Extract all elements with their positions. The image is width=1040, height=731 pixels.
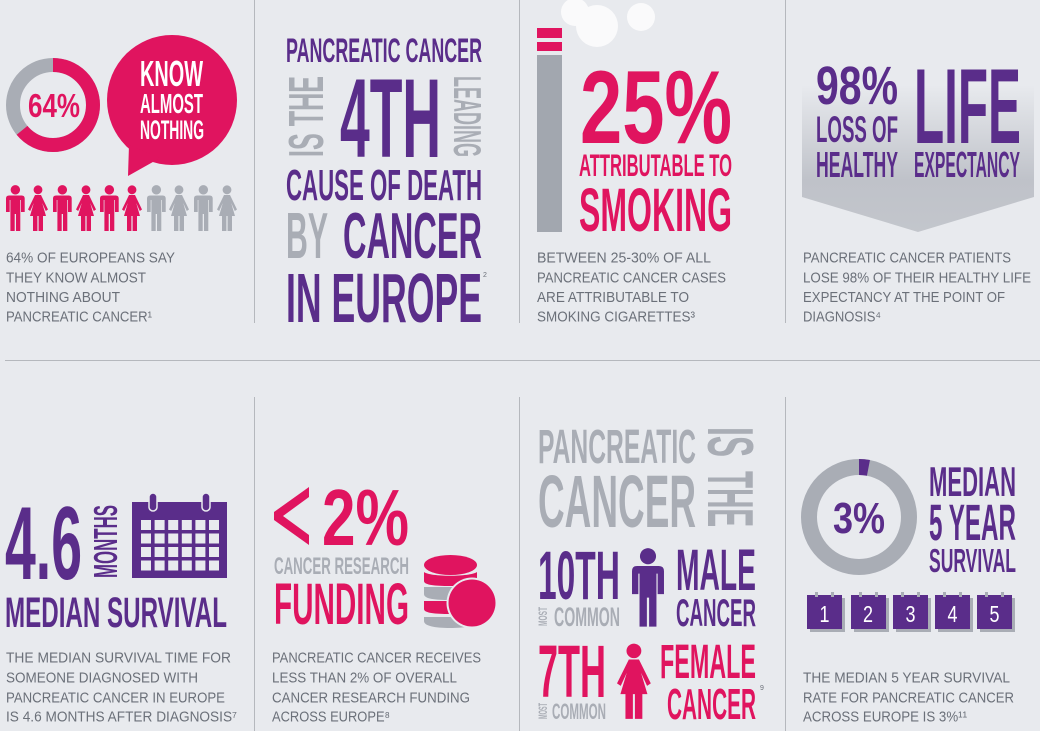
text block: funding: PANCREATIC CANCER RECEIVES: [272, 650, 481, 666]
text block: smoking: SMOKING CIGARETTES³: [537, 310, 695, 326]
heading: smoking: SMOKING: [579, 176, 732, 244]
speech bubble: know almost nothing: KNOW: [140, 53, 203, 94]
vertical text: most: MOST: [536, 607, 550, 626]
panel: most common cancer: MALE: [676, 538, 756, 603]
icon: five calendars: 5: [990, 601, 1000, 627]
big figure: 2%: 2%: [322, 473, 409, 562]
less-than sign: [274, 487, 309, 545]
icon: smoke: [561, 0, 655, 47]
icon: coins: [424, 555, 498, 628]
text block: funding: CANCER RESEARCH FUNDING: [272, 690, 470, 706]
text block: funding: ACROSS EUROPE⁸: [272, 710, 390, 726]
text block: median survival: IS 4.6 MONTHS AFTER DIAGNOSIS⁷: [6, 710, 237, 726]
text block: five year survival: RATE FOR PANCREATIC CANCER: [803, 690, 1014, 706]
text block: median survival: [6, 650, 237, 726]
panel: most common cancer: CANCER: [667, 680, 756, 729]
text block: median survival: PANCREATIC CANCER IN EUROPE: [6, 690, 225, 706]
panel: research funding: [272, 473, 498, 726]
panel: most common cancer: CANCER: [676, 592, 756, 635]
heading: median survival: MEDIAN SURVIVAL: [5, 589, 227, 637]
panel: know almost nothing: [6, 35, 237, 326]
panel: 4th leading cause: 4TH: [340, 56, 441, 181]
panel: 4th leading cause: CANCER: [343, 199, 482, 272]
footnote 2: 2: [483, 272, 487, 279]
text block: 64% of Europeans: [6, 250, 175, 326]
heading: cancer research: CANCER RESEARCH: [274, 553, 409, 580]
panel: most common cancer: [536, 420, 767, 729]
text block: life expectancy: PANCREATIC CANCER PATIENTS: [803, 250, 1011, 266]
icon: five calendars: 3: [906, 601, 916, 627]
panel: 4th leading cause: LEADING: [445, 76, 488, 157]
speech bubble: know almost nothing: NOTHING: [140, 115, 204, 145]
donut chart: 3%: [809, 467, 909, 567]
text block: 64% of Europeans: PANCREATIC CANCER¹: [6, 310, 152, 326]
text block: five year survival: [803, 670, 1014, 726]
speech bubble: know almost nothing: ALMOST: [140, 88, 203, 119]
panel: life expectancy: [802, 46, 1034, 326]
text block: smoking: BETWEEN 25-30% OF ALL: [537, 250, 711, 266]
heading: loss of: LOSS OF: [816, 109, 898, 150]
speech bubble: know almost nothing: [107, 35, 237, 176]
text block: five year survival: ACROSS EUROPE IS 3%¹¹: [803, 710, 967, 726]
heading: funding: FUNDING: [274, 572, 409, 637]
text block: 64% of Europeans: 64% OF EUROPEANS SAY: [6, 250, 175, 266]
panel: life expectancy: HEALTHY: [816, 144, 898, 185]
panel: 4th leading cause: [279, 32, 488, 337]
heading: pancreatic cancer: PANCREATIC CANCER: [286, 32, 482, 70]
heading: cause of death: CAUSE OF DEATH: [286, 161, 482, 210]
icon: cigarette: [537, 28, 562, 232]
icon: five calendars: [807, 592, 1015, 632]
panel: most common cancer: CANCER: [538, 460, 696, 543]
text block: funding: LESS THAN 2% OF OVERALL: [272, 670, 457, 686]
text block: median survival: THE MEDIAN SURVIVAL TIME FOR: [6, 650, 231, 666]
icon: five calendars: 1: [820, 601, 830, 627]
label: common: COMMON: [552, 699, 606, 724]
icon: five calendars: 2: [863, 601, 873, 627]
big figure: 4.6: 4.6: [5, 486, 82, 602]
panel: most common cancer: FEMALE: [660, 635, 756, 689]
icon: man: [632, 548, 664, 627]
text block: 64% of Europeans: THEY KNOW ALMOST: [6, 270, 146, 286]
icon: woman: [617, 644, 651, 719]
text block: life expectancy: EXPECTANCY AT THE POINT OF: [803, 290, 1005, 306]
icon: calendar: [132, 493, 227, 578]
label: common: COMMON: [554, 602, 620, 632]
icon: five calendars: 4: [948, 601, 958, 627]
panel: most common cancer: 7TH: [538, 630, 606, 713]
text block: smoking: [537, 250, 726, 326]
heading: attributable to: ATTRIBUTABLE TO: [579, 147, 732, 183]
text block: median survival: SOMEONE DIAGNOSED WITH: [6, 670, 198, 686]
icon: row of ten people: [6, 185, 237, 231]
big figure: 25%: 25%: [580, 50, 732, 166]
heading: pancreatic: PANCREATIC: [538, 420, 696, 474]
text block: five year survival: THE MEDIAN 5 YEAR SURVIVAL: [803, 670, 1010, 686]
big figure: 98%: 98%: [816, 56, 898, 116]
panel: five year survival: [803, 458, 1016, 726]
heading: in europe: IN EUROPE: [286, 259, 482, 337]
vertical text: is the: IS THE: [279, 76, 334, 157]
text block: life expectancy: [803, 250, 1031, 326]
panel: smoking: [537, 0, 732, 326]
text block: smoking: ARE ATTRIBUTABLE TO: [537, 290, 689, 306]
vertical text: months: MONTHS: [87, 505, 124, 578]
donut chart: 64%: [13, 65, 93, 145]
footnote 9: 9: [760, 685, 764, 692]
donut chart: 64%: 64%: [28, 87, 80, 124]
arrow banner: [802, 85, 1034, 232]
panel: 4th leading cause: BY: [286, 199, 328, 272]
panel: most common cancer: IS: [694, 427, 767, 457]
panel: most common cancer: 10TH: [538, 537, 620, 614]
donut chart: 3%: 3%: [833, 494, 885, 543]
text block: funding: [272, 650, 481, 726]
text block: life expectancy: DIAGNOSIS⁴: [803, 310, 881, 326]
panel: median survival: [5, 486, 237, 726]
text block: smoking: PANCREATIC CANCER CASES: [537, 270, 726, 286]
panel: most common cancer: MOST: [536, 703, 550, 719]
panel: most common cancer: THE: [694, 471, 767, 527]
text block: 64% of Europeans: NOTHING ABOUT: [6, 290, 120, 306]
